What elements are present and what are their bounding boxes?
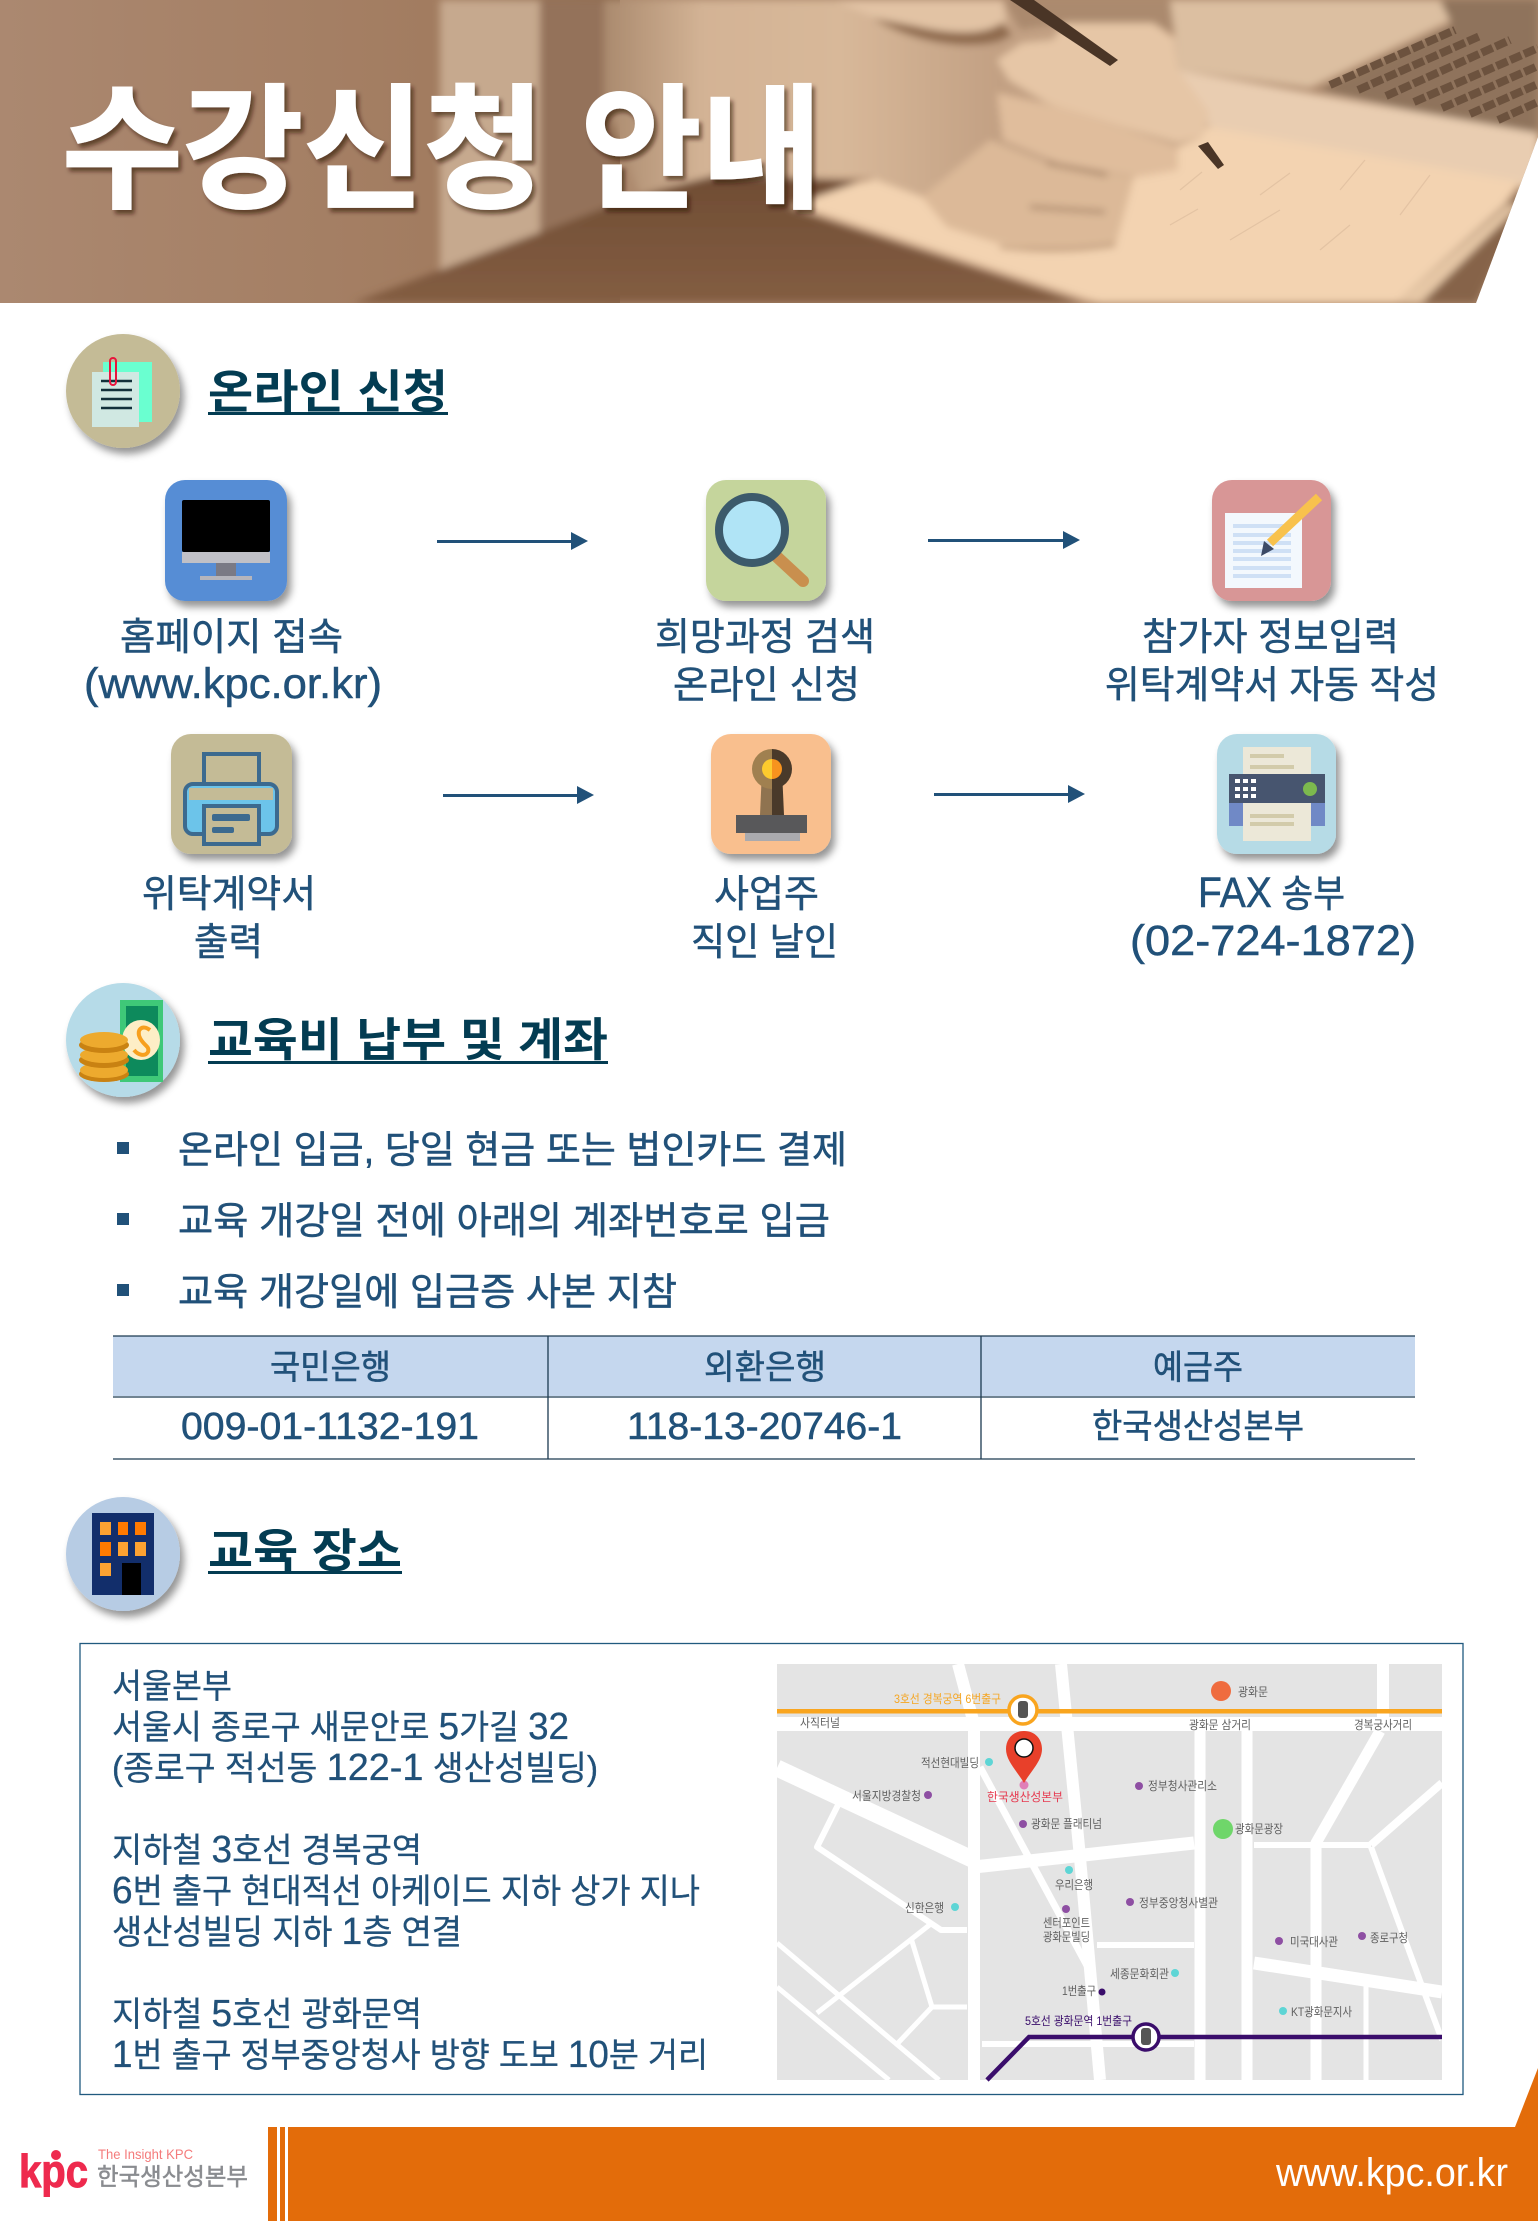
- corner wedge: [1515, 2068, 1538, 2127]
- label: [84, 617, 382, 708]
- label: (02-724-1872): [1130, 917, 1416, 965]
- map: 세종문화회관: [1110, 1967, 1169, 1981]
- heading: tuition payment: 교육비 납부 및 계좌: [208, 1014, 608, 1066]
- section: online application: [66, 334, 448, 448]
- step: participant info: [1105, 480, 1439, 707]
- address and directions: (종로구 적선동 122-1 생산성빌딩): [112, 1746, 598, 1789]
- address and directions: 지하철 3호선 경복궁역: [112, 1828, 422, 1871]
- label: 출력: [194, 922, 263, 964]
- label: 참가자 정보입력: [1142, 617, 1399, 659]
- address and directions: 서울본부: [112, 1668, 232, 1706]
- header photo banner: [0, 0, 1538, 303]
- map: 정부청사관리소: [1148, 1779, 1217, 1793]
- label: [1130, 869, 1416, 965]
- table: bank accounts: [113, 1336, 1415, 1459]
- logo: KPC: The Insight KPC: [98, 2146, 193, 2162]
- title: 수강신청 안내: [62, 75, 822, 226]
- label: (www.kpc.or.kr): [84, 660, 382, 708]
- label: [691, 874, 838, 964]
- arrow: [934, 785, 1085, 803]
- logo: KPC: 한국생산성본부: [97, 2164, 248, 2191]
- panel: location box: [80, 1644, 1463, 2094]
- map: 1번출구: [1062, 1984, 1096, 1998]
- label: 온라인 신청: [673, 665, 860, 707]
- logo: KPC: kpc: [19, 2145, 88, 2197]
- icon: monitor: [165, 480, 287, 601]
- heading: online application: 온라인 신청: [208, 366, 448, 418]
- address and directions: 지하철 5호선 광화문역: [112, 1992, 422, 2035]
- map: 광화문 플래티넘: [1031, 1817, 1102, 1831]
- icon: building: [66, 1497, 180, 1611]
- icon: document and pencil: [1212, 480, 1331, 601]
- label: FAX 송부: [1198, 869, 1345, 917]
- map: KT광화문지사: [1291, 2005, 1352, 2019]
- website: www.kpc.or.kr: [1275, 2151, 1508, 2195]
- footer bar: [268, 2127, 1538, 2221]
- step: company seal: [691, 734, 838, 964]
- icon: fax machine: [1217, 734, 1336, 854]
- map: 센터포인트: [1043, 1916, 1090, 1930]
- bullet list: [117, 1130, 847, 1314]
- bullet list: 온라인 입금, 당일 현금 또는 법인카드 결제: [178, 1130, 847, 1172]
- address and directions: 6번 출구 현대적선 아케이드 지하 상가 지나: [112, 1869, 700, 1912]
- label: [1105, 617, 1439, 707]
- table: bank accounts: 118-13-20746-1: [627, 1406, 902, 1448]
- step: fax: [1130, 734, 1416, 965]
- address and directions: 서울시 종로구 새문안로 5가길 32: [112, 1705, 569, 1748]
- table: bank accounts: 국민은행: [270, 1349, 391, 1387]
- map: [777, 1664, 1442, 2080]
- label: 직인 날인: [691, 922, 838, 964]
- label: 위탁계약서 자동 작성: [1105, 665, 1439, 707]
- map: 광화문빌딩: [1043, 1930, 1090, 1944]
- label: 사업주: [714, 874, 819, 916]
- map: 우리은행: [1055, 1877, 1093, 1892]
- address and directions: [112, 1668, 708, 2076]
- map: 신한은행: [905, 1900, 944, 1915]
- table: bank accounts: 한국생산성본부: [1092, 1408, 1304, 1446]
- icon: clipboard note: [66, 334, 180, 448]
- map: 서울지방경찰청: [852, 1789, 921, 1803]
- section: venue: [66, 1497, 1463, 2094]
- table: bank accounts: 외환은행: [704, 1349, 826, 1387]
- icon: printer: [171, 734, 292, 854]
- arrow: [443, 786, 594, 804]
- map: 3호선 경복궁역 6번출구: [894, 1692, 1001, 1706]
- map: 광화문 삼거리: [1189, 1718, 1251, 1732]
- icon: magnifier: [706, 480, 826, 601]
- map: 광화문광장: [1235, 1822, 1283, 1836]
- step: course search: [655, 480, 875, 707]
- label: [655, 617, 875, 707]
- heading: venue: 교육 장소: [208, 1525, 402, 1577]
- bullet list: 교육 개강일 전에 아래의 계좌번호로 입금: [178, 1201, 830, 1243]
- map: 5호선 광화문역 1번출구: [1025, 2014, 1132, 2028]
- map: 경복궁사거리: [1354, 1718, 1412, 1732]
- map: 미국대사관: [1290, 1935, 1338, 1949]
- map: 광화문: [1238, 1685, 1268, 1699]
- arrow: [437, 532, 588, 550]
- map: 종로구청: [1370, 1931, 1408, 1945]
- table: bank accounts: 예금주: [1153, 1349, 1243, 1387]
- map: 적선현대빌딩: [921, 1756, 979, 1770]
- table: bank accounts: 009-01-1132-191: [181, 1406, 479, 1448]
- bullet list: 교육 개강일에 입금증 사본 지참: [178, 1272, 677, 1314]
- label: 위탁계약서: [142, 874, 316, 916]
- address and directions: 1번 출구 정부중앙청사 방향 도보 10분 거리: [112, 2033, 708, 2076]
- step: print contract: [142, 734, 316, 964]
- step: homepage: [84, 480, 382, 708]
- icon: money and coins: [66, 983, 180, 1097]
- label: [142, 874, 316, 964]
- section: tuition payment: [66, 983, 1415, 1459]
- address and directions: 생산성빌딩 지하 1층 연결: [112, 1910, 462, 1953]
- label: 홈페이지 접속: [120, 617, 343, 659]
- icon: stamp: [711, 734, 831, 854]
- arrow: [928, 531, 1080, 549]
- map: 사직터널: [800, 1716, 840, 1730]
- map: 정부중앙청사별관: [1139, 1896, 1218, 1910]
- logo: KPC: [19, 2145, 248, 2197]
- label: 희망과정 검색: [655, 617, 875, 659]
- map: 한국생산성본부: [987, 1790, 1063, 1804]
